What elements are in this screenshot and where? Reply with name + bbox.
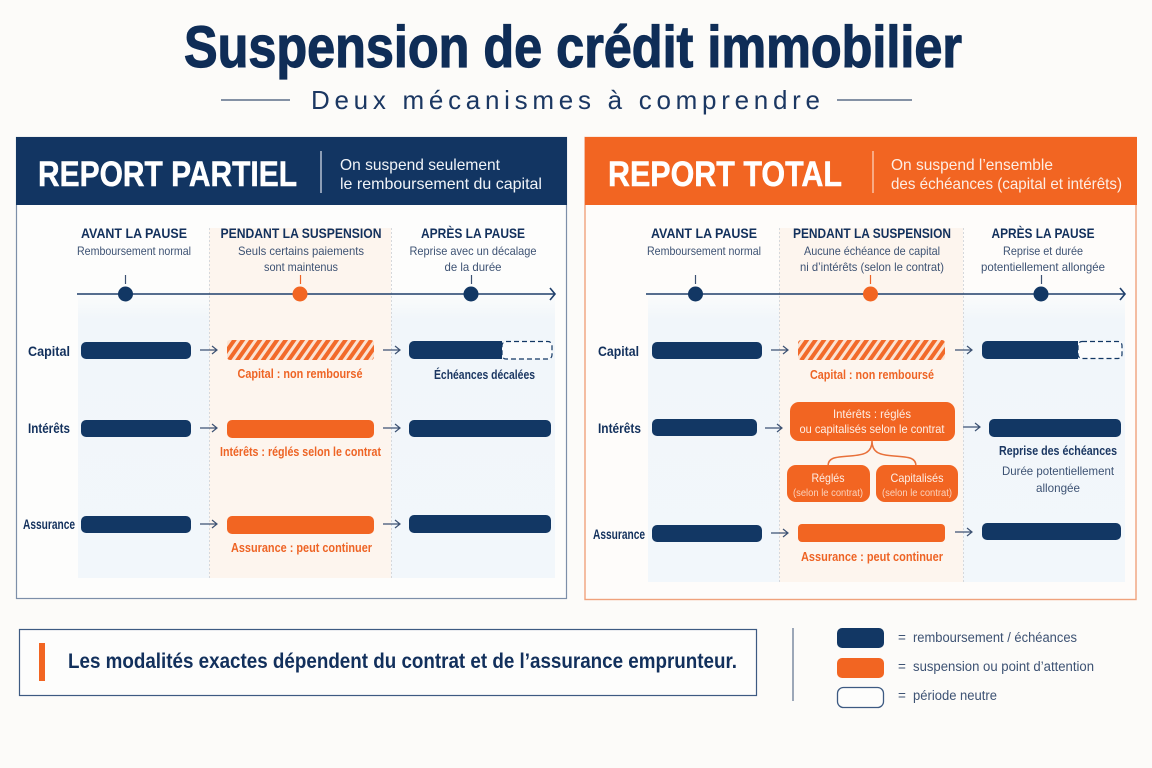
callout: intérêts réglés ou capitalisés: Réglés (812, 471, 844, 485)
panel header: report total (585, 137, 1137, 205)
column heading: pendant la suspension: sont maintenus (264, 260, 338, 274)
row: intérêts: Intérêts (598, 420, 641, 436)
row: assurance: Assurance : peut continuer (231, 541, 372, 555)
column heading: avant la pause: Remboursement normal (77, 244, 191, 258)
timeline (646, 275, 1125, 302)
row: intérêts: allongée (1036, 481, 1080, 495)
panel: report total (585, 137, 1137, 600)
panel header: report partiel: le remboursement du capital (340, 176, 542, 193)
panel header: report total: des échéances (capital et intérêts) (891, 176, 1122, 193)
row: intérêts (598, 419, 1121, 495)
column heading: avant la pause: Remboursement normal (647, 244, 761, 258)
column heading: avant la pause (647, 225, 761, 258)
callout: intérêts réglés ou capitalisés: (selon le contrat) (793, 488, 863, 499)
row: capital: Échéances décalées (434, 367, 535, 382)
column heading: après la pause: de la durée (444, 260, 502, 274)
title: Suspension de crédit immobilier (184, 15, 962, 80)
row: capital: Capital : non remboursé (238, 367, 363, 381)
panel: report partiel (16, 137, 567, 598)
legend item: remboursement: = (898, 630, 906, 645)
panel header: report partiel (16, 137, 567, 205)
column heading: avant la pause (77, 225, 191, 258)
row: intérêts: Intérêts : réglés selon le contrat (220, 445, 382, 459)
column heading: pendant la suspension: PENDANT LA SUSPENSION (793, 225, 951, 241)
callout: intérêts réglés ou capitalisés (787, 402, 958, 502)
row: assurance: Assurance (23, 516, 75, 532)
row: assurance: Assurance : peut continuer (801, 550, 943, 564)
column heading: après la pause (981, 225, 1105, 274)
legend item: suspension (837, 658, 1094, 678)
column backgrounds (648, 228, 1125, 582)
callout: modalités: Les modalités exactes dépendent du contrat et de l’assurance emprunteur. (68, 650, 737, 673)
callout: intérêts réglés ou capitalisés: Capitalisés (890, 471, 944, 485)
row: intérêts: Reprise des échéances (999, 443, 1117, 458)
column heading: après la pause: Reprise et durée (1003, 244, 1083, 258)
row: intérêts: Intérêts (28, 420, 70, 436)
panel header: report total: On suspend l’ensemble (891, 157, 1053, 174)
row: intérêts (28, 420, 551, 459)
column heading: après la pause: Reprise avec un décalage (410, 244, 537, 258)
row: capital: Capital : non remboursé (810, 368, 934, 382)
column heading: après la pause: APRÈS LA PAUSE (992, 225, 1094, 241)
panel header: report partiel: REPORT PARTIEL (38, 155, 297, 194)
column backgrounds (78, 228, 555, 578)
panel header: report total: REPORT TOTAL (608, 155, 842, 194)
callout: modalités (20, 630, 756, 696)
column heading: avant la pause: AVANT LA PAUSE (81, 225, 187, 241)
row: capital: Capital (28, 343, 70, 359)
legend (793, 628, 1094, 708)
legend item: période neutre: = (898, 688, 906, 703)
column heading: pendant la suspension: ni d’intérêts (selon le contrat) (800, 260, 944, 274)
row: assurance (593, 523, 1121, 564)
column heading: après la pause (410, 225, 537, 274)
legend item: remboursement: remboursement / échéances (913, 630, 1077, 645)
row: capital: Capital (598, 343, 639, 359)
panel header: report partiel: On suspend seulement (340, 157, 501, 174)
column heading: pendant la suspension: Seuls certains paiements (238, 244, 364, 258)
subtitle: Deux mécanismes à comprendre (311, 85, 820, 115)
row: assurance (23, 515, 551, 555)
legend item: période neutre (838, 688, 997, 708)
row: assurance: Assurance (593, 526, 645, 542)
column heading: avant la pause: AVANT LA PAUSE (651, 225, 757, 241)
row: capital (28, 340, 552, 382)
callout: intérêts réglés ou capitalisés: ou capitalisés selon le contrat (800, 422, 945, 436)
column heading: après la pause: potentiellement allongée (981, 260, 1105, 274)
callout: intérêts réglés ou capitalisés: Intérêts : réglés (833, 407, 911, 421)
legend item: période neutre: période neutre (913, 688, 997, 703)
column heading: pendant la suspension (220, 225, 382, 274)
legend item: suspension: suspension ou point d’attention (913, 659, 1094, 674)
row: intérêts: Durée potentiellement (1002, 464, 1115, 478)
timeline (77, 275, 555, 302)
column heading: pendant la suspension: PENDANT LA SUSPENSION (220, 225, 382, 241)
legend item: remboursement (837, 628, 1077, 648)
legend item: suspension: = (898, 659, 906, 674)
column heading: après la pause: APRÈS LA PAUSE (421, 225, 525, 241)
row: capital (598, 340, 1122, 382)
column heading: pendant la suspension (793, 225, 951, 274)
callout: intérêts réglés ou capitalisés: (selon le contrat) (882, 488, 952, 499)
column heading: pendant la suspension: Aucune échéance de capital (804, 244, 940, 258)
